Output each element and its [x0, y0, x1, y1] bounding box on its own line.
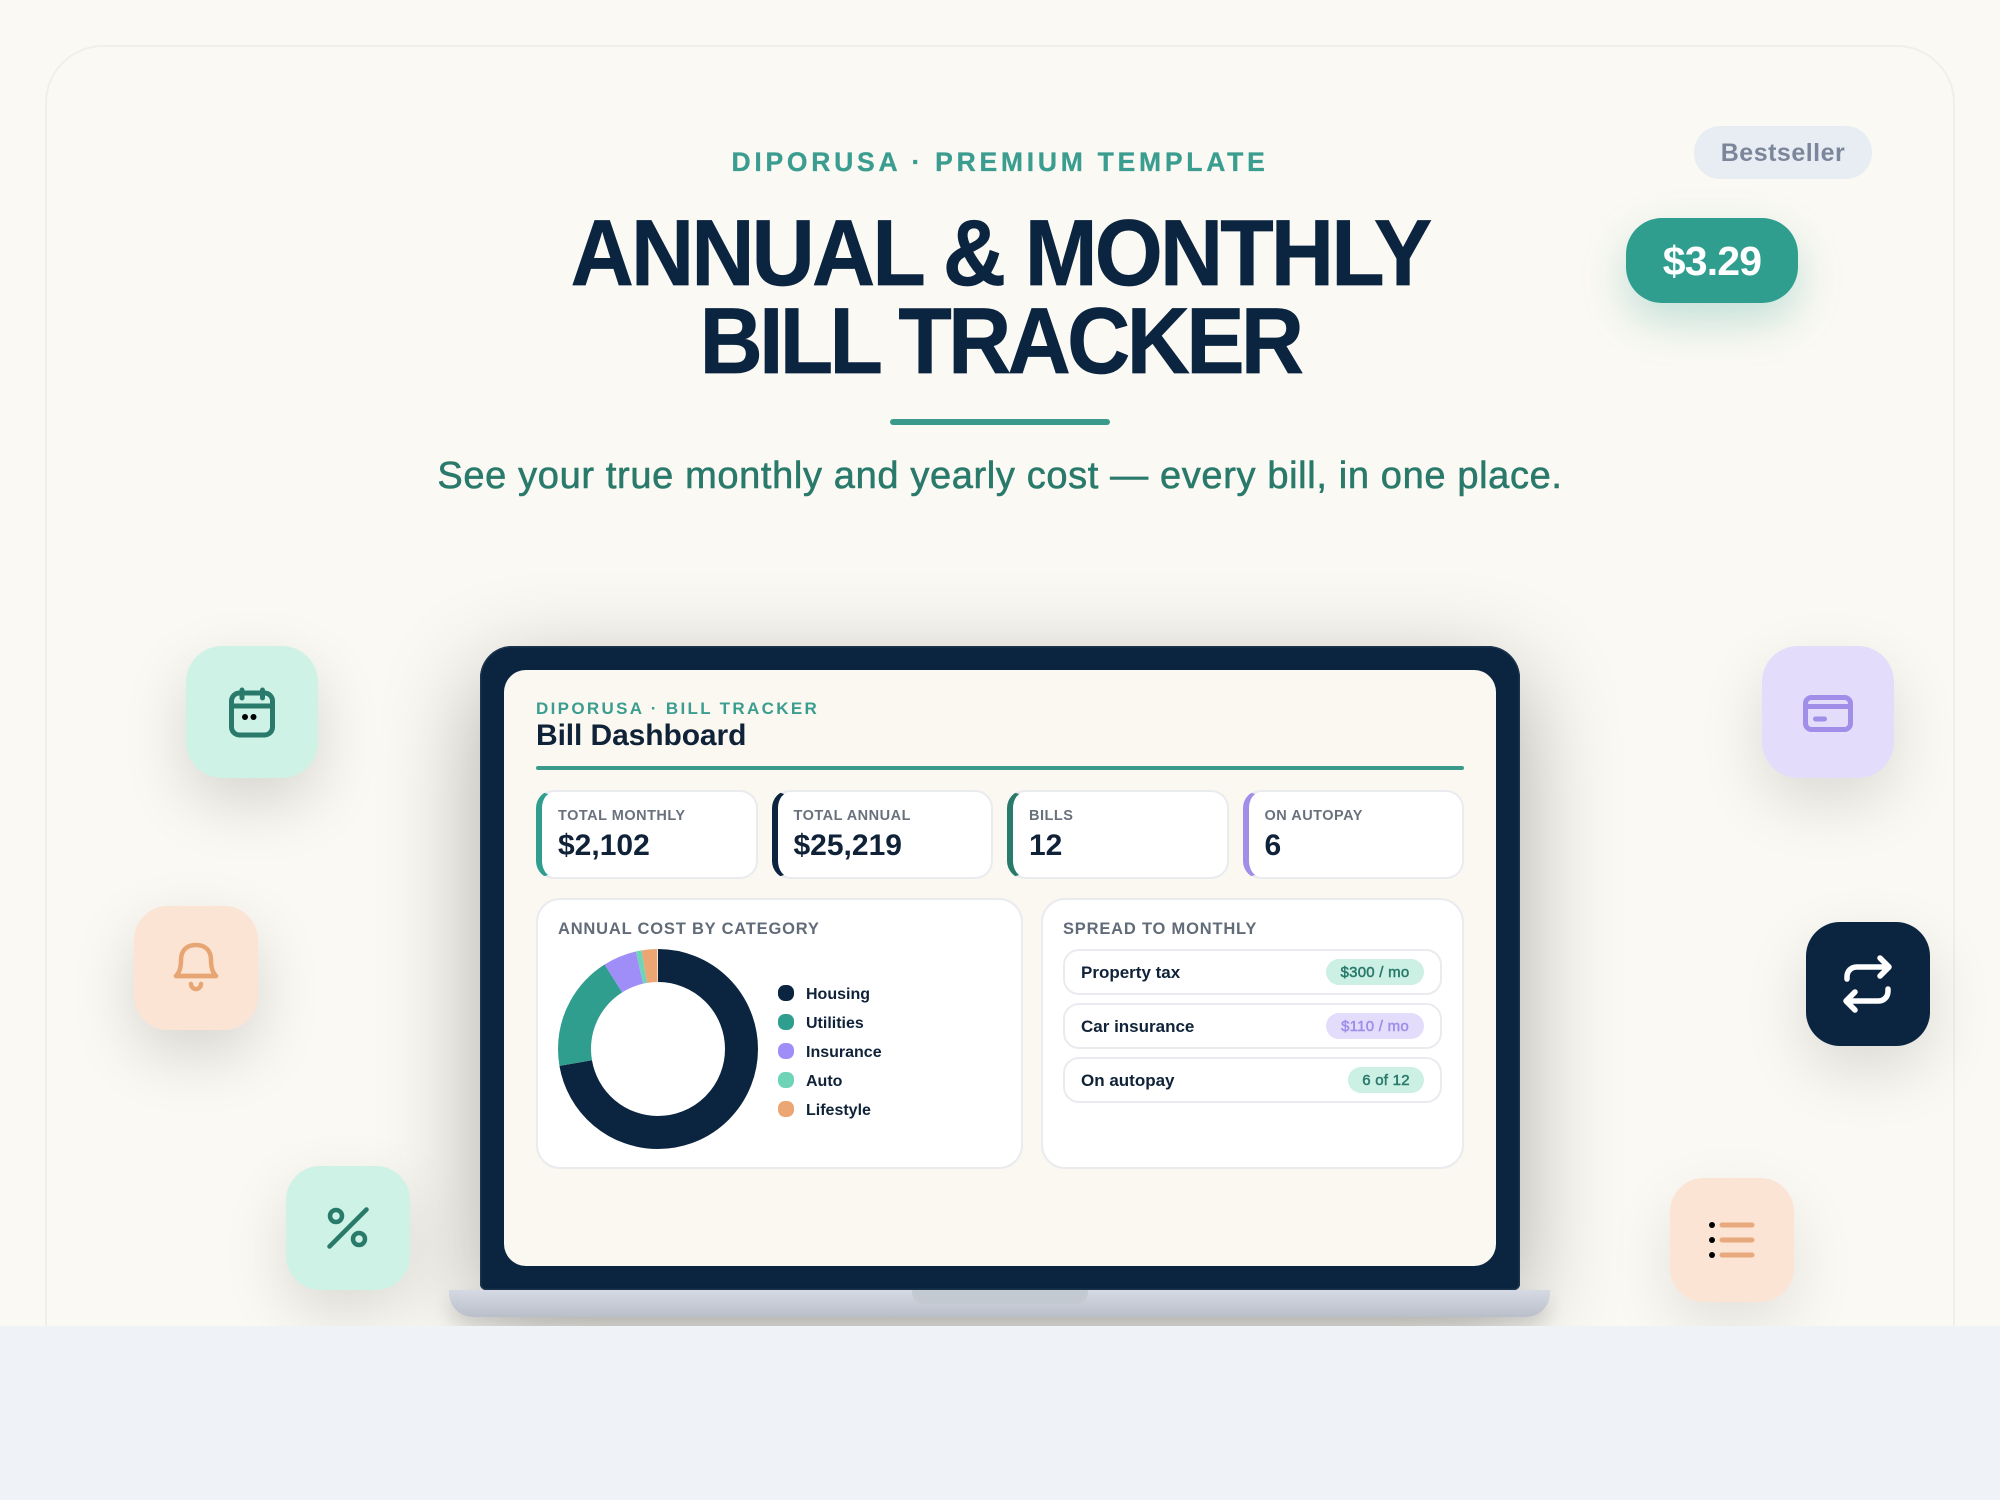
- row: on autopay: On autopay: [1081, 1071, 1175, 1090]
- icon: credit card tile: [1762, 646, 1894, 778]
- badge: price: [1626, 218, 1798, 303]
- laptop base: [449, 1290, 1550, 1317]
- dashboard rule: [536, 766, 1464, 770]
- kpi: bills: BILLS: [1029, 808, 1073, 824]
- title: BILL TRACKER: [700, 288, 1300, 392]
- panel heading: spread to monthly: SPREAD TO MONTHLY: [1063, 920, 1257, 938]
- kpi: total annual: TOTAL ANNUAL: [794, 808, 911, 824]
- laptop screen: [504, 670, 1496, 1266]
- icon: bell tile: [134, 906, 258, 1030]
- title: ANNUAL & MONTHLY: [571, 200, 1429, 304]
- kpi: on autopay: 6: [1264, 829, 1281, 862]
- title rule: [890, 419, 1110, 425]
- icon: list tile: [1670, 1178, 1794, 1302]
- row: on autopay: 6 of 12: [1362, 1072, 1410, 1089]
- cream hero background: Utilities: [806, 1015, 864, 1032]
- row: car insurance: $110 / mo: [1341, 1018, 1409, 1035]
- badge: bestseller: Bestseller: [1721, 139, 1845, 167]
- row: property tax: $300 / mo: [1341, 964, 1409, 981]
- kpi: total monthly: [536, 790, 758, 879]
- legend: [778, 985, 882, 1119]
- row: on autopay: [1063, 1057, 1442, 1103]
- panel: spread to monthly: [1041, 898, 1464, 1169]
- icon: percent tile: [286, 1166, 410, 1290]
- kpi: total monthly: $2,102: [558, 829, 650, 862]
- row: car insurance: Car insurance: [1081, 1017, 1194, 1036]
- row: car insurance: [1063, 1003, 1442, 1049]
- panel heading: annual cost: ANNUAL COST BY CATEGORY: [558, 920, 820, 938]
- laptop lid: [480, 646, 1520, 1290]
- kpi: on autopay: [1242, 790, 1464, 879]
- kpi: bills: [1007, 790, 1228, 879]
- icon: calendar tile: [186, 646, 318, 778]
- badge: price: $3.29: [1663, 238, 1761, 284]
- dashboard eyebrow: DIPORUSA · BILL TRACKER: [536, 699, 819, 718]
- cream hero background: Auto: [806, 1073, 842, 1090]
- dashboard title: Bill Dashboard: [536, 719, 746, 752]
- badge: bestseller: [1694, 126, 1872, 179]
- cream hero background: Insurance: [806, 1044, 882, 1061]
- laptop: [421, 617, 1579, 1326]
- row: property tax: [1063, 949, 1442, 995]
- eyebrow: DIPORUSA · PREMIUM TEMPLATE: [731, 147, 1269, 177]
- cream hero background: Lifestyle: [806, 1102, 871, 1119]
- kpi: total monthly: TOTAL MONTHLY: [558, 808, 686, 824]
- row: property tax: Property tax: [1081, 963, 1180, 982]
- cream hero background: Housing: [806, 986, 870, 1003]
- kpi: total annual: [772, 790, 993, 879]
- laptop notch: [912, 1290, 1088, 1304]
- kpi: total annual: $25,219: [794, 829, 902, 862]
- panel: annual cost by category: [536, 898, 1023, 1169]
- kpi: bills: 12: [1029, 829, 1062, 862]
- title: [571, 200, 1432, 392]
- icon: repeat tile: [1806, 922, 1930, 1046]
- kpi: on autopay: ON AUTOPAY: [1264, 808, 1363, 824]
- subtitle: See your true monthly and yearly cost — every bill, in one place.: [437, 455, 1563, 497]
- donut chart: [558, 949, 758, 1149]
